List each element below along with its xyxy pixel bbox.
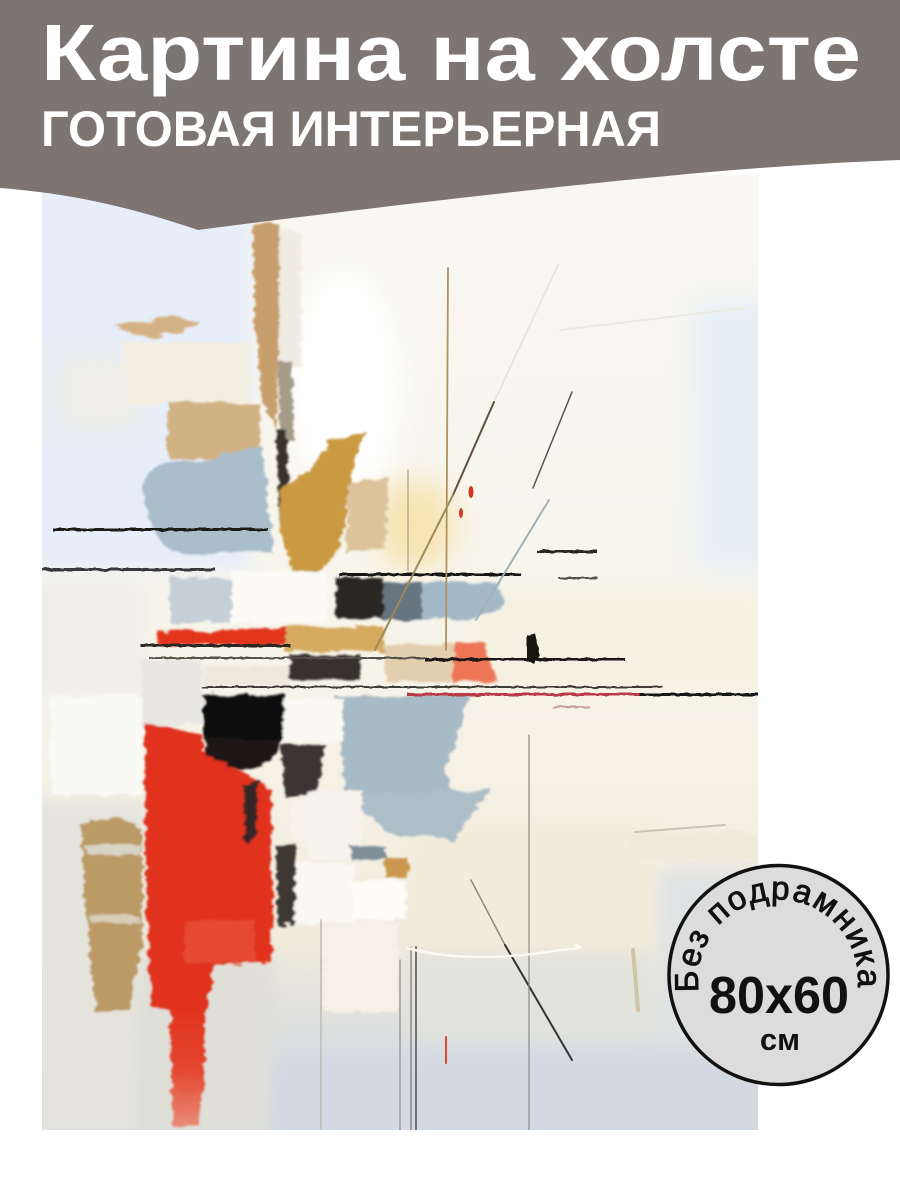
blue-gray lower wedge: [345, 790, 490, 842]
black line center: [339, 573, 521, 576]
faint horizontal stroke upper right: [560, 308, 745, 330]
salmon patch: [452, 642, 498, 682]
cream band right: [631, 832, 766, 858]
fine line work: [321, 265, 745, 1130]
white ridge lower: [407, 945, 580, 957]
vertical line second: [415, 947, 417, 1130]
gray wash, lower centre: [150, 964, 270, 1130]
warm cream wash, right: [484, 602, 747, 620]
pink dash: [553, 706, 590, 708]
big red panel: [145, 722, 272, 1012]
drop one: [468, 486, 474, 498]
blue-gray band center right: [421, 583, 505, 620]
vertical line faint: [399, 960, 401, 1130]
tan block: [168, 403, 260, 459]
gray diagonal lower: [471, 880, 505, 945]
ochre crumbly band: [285, 627, 385, 651]
dashed line: [202, 686, 662, 688]
dark tail by red: [280, 745, 325, 800]
blue-gray large wedge: [336, 696, 470, 800]
black patch: [203, 695, 285, 739]
gray-green wash, under beige: [426, 962, 638, 964]
white block lower: [352, 881, 406, 920]
unit: см: [760, 1022, 800, 1057]
olive diagonal line: [375, 495, 453, 650]
red bar: [157, 628, 285, 645]
black mark: [527, 634, 540, 664]
cream patch left: [125, 342, 250, 404]
faint gray line right: [558, 577, 598, 579]
pale gray-green wash, lower left: [42, 800, 144, 1130]
white block middle: [283, 699, 343, 742]
vertical gray line: [528, 735, 530, 1130]
pale blue wash, right side: [694, 298, 758, 570]
black over red: [205, 738, 282, 770]
pale stroke beside tan: [279, 230, 301, 365]
tan wash by ochre: [346, 478, 388, 552]
black line upper-left 1: [53, 528, 268, 531]
white drips: [322, 922, 398, 1012]
red drip: [170, 1000, 206, 1126]
blue diagonal: [476, 500, 549, 620]
blue-gray band center left: [170, 578, 235, 622]
subtitle: ГОТОВАЯ ИНТЕРЬЕРНАЯ: [41, 101, 661, 157]
vertical line pair: [410, 947, 412, 1130]
white column: [295, 863, 355, 925]
tan vertical stroke: [253, 224, 279, 430]
brown tan panel: [81, 818, 142, 1010]
pale diagonal line: [494, 265, 558, 402]
black strokes: [42, 528, 758, 708]
dark diagonal lower: [505, 945, 572, 1060]
black line across right edge: [640, 693, 758, 696]
ochre small patch: [384, 859, 409, 878]
white glow, upper center: [292, 270, 402, 482]
dark thin diagonal: [533, 392, 572, 488]
dark mottled band: [290, 655, 360, 681]
ochre block: [280, 432, 365, 582]
white zone mid-left: [50, 695, 142, 795]
pale zone, left middle: [30, 580, 145, 695]
black line mid left: [149, 657, 425, 659]
pale wash, lower right: [658, 868, 745, 968]
cream wash, left of blue: [60, 355, 140, 430]
size badge: [667, 864, 890, 1086]
pale streak two: [90, 915, 140, 923]
black fleck right of red: [243, 780, 258, 845]
tan dash right: [635, 825, 725, 832]
gray scratches on vertical stroke: [278, 362, 294, 440]
gray patch by red: [142, 660, 202, 725]
pale blue sky wash, upper left: [42, 192, 252, 570]
red line: [407, 693, 640, 696]
dark scratches on vertical stroke: [276, 430, 290, 530]
beige wash, lower center: [410, 825, 655, 950]
pale yellow glow: [375, 480, 455, 570]
drop two: [459, 508, 463, 518]
tan vertical line: [446, 268, 448, 650]
vertical line center: [407, 470, 409, 570]
rough palette knife strokes: [48, 221, 506, 1128]
abstract painting on canvas: [20, 165, 785, 1145]
curved label: Без подрамника: [674, 881, 876, 990]
upper white column: [307, 790, 362, 860]
red paint drops: [459, 486, 474, 518]
pale streaks on brown panel: [86, 845, 141, 855]
title: Картина на холсте: [41, 8, 861, 97]
black line beneath red bar: [140, 644, 290, 647]
light band left of dark: [205, 666, 290, 686]
pale strip beside panel: [290, 800, 342, 840]
dark flecks lower: [277, 845, 296, 925]
header ribbon: [0, 0, 900, 230]
dark square: [336, 578, 383, 618]
gray mark lower: [350, 845, 385, 859]
red tick low: [445, 1037, 447, 1063]
small tan line right: [633, 950, 638, 1010]
tan band: [385, 645, 455, 680]
black line upper-left 2: [42, 568, 215, 571]
blue-gray blob: [143, 445, 272, 553]
lighter red inner: [185, 920, 255, 962]
dimensions: 80x60: [709, 967, 849, 1025]
short black line right: [537, 550, 597, 553]
slate band beside dark: [382, 582, 422, 620]
blue-gray wash, bottom: [275, 1055, 765, 1145]
vertical line faint left: [320, 920, 322, 1130]
tan horizontal stroke: [113, 316, 200, 338]
dark diagonal line: [453, 402, 494, 495]
badge circle: [669, 866, 888, 1084]
black line mid right: [425, 658, 625, 661]
white block upper: [232, 571, 327, 623]
